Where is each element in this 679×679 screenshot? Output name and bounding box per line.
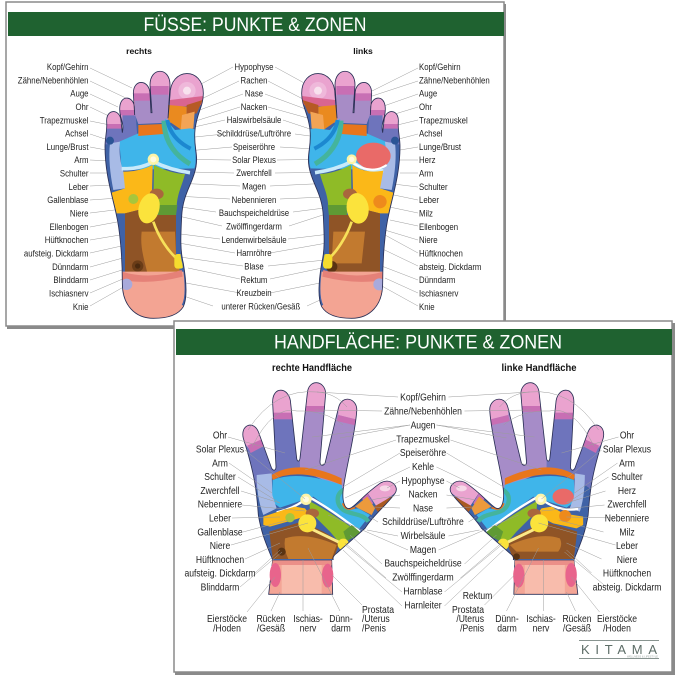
labels: right hand column: Solar Plexus: [196, 444, 244, 455]
labels: palm centre column: Augen: [411, 420, 435, 431]
heading: links: links: [353, 46, 373, 56]
labels: feet centre column: Schilddrüse/Luftröhre: [217, 128, 291, 139]
labels: right hand column: Arm: [212, 458, 228, 469]
labels: right hand bottom row: [207, 604, 395, 634]
labels: right hand bottom row: /Penis: [362, 623, 386, 634]
labels: right foot column: Ohr: [75, 101, 89, 112]
illustration: left hand: [443, 375, 610, 594]
labels: right hand bottom row: darm: [331, 623, 351, 634]
labels: left hand column: Milz: [619, 527, 635, 538]
labels: feet centre column: Lendenwirbelsäule: [221, 234, 287, 245]
labels: palm centre column: Harnleiter: [404, 600, 442, 611]
heading: rechte Handfläche: rechte Handfläche: [272, 363, 352, 374]
feet title bar: [8, 12, 504, 36]
illustration: right foot: [104, 70, 204, 319]
labels: palm centre column: Kopf/Gehirn: [400, 392, 446, 403]
labels: left hand bottom row: Rücken: [562, 613, 592, 624]
labels: left hand bottom row: Rektum: [463, 590, 493, 601]
labels: palm centre column: Bauchspeicheldrüse: [384, 558, 462, 569]
labels: right hand bottom row: /Uterus: [362, 613, 390, 624]
illustration: right hand: [237, 375, 403, 594]
labels: left hand column: Nebenniere: [605, 513, 649, 524]
labels: palm centre column: Nacken: [408, 489, 438, 500]
labels: palm centre column: Nase: [413, 503, 433, 514]
labels: feet centre column: Rachen: [241, 75, 268, 86]
labels: left foot column: Milz: [419, 208, 433, 219]
labels: right hand bottom row: Rücken: [256, 613, 286, 624]
labels: left foot column: Ellenbogen: [419, 221, 458, 232]
labels: left hand bottom row: Prostata: [452, 604, 485, 615]
heading: rechts: rechts: [126, 46, 152, 56]
labels: left hand column: Zwerchfell: [607, 499, 647, 510]
labels: left hand column: Leber: [616, 540, 638, 551]
labels: right hand column: Ohr: [213, 430, 227, 441]
labels: feet centre column: Zwerchfell: [236, 167, 272, 178]
labels: right hand column: Niere: [210, 540, 230, 551]
labels: right hand bottom row: Prostata: [362, 604, 395, 615]
labels: feet centre column: Speiseröhre: [233, 141, 275, 152]
labels: left hand bottom row: nerv: [533, 623, 550, 634]
labels: feet centre column: Blase: [244, 261, 264, 272]
labels: left hand column: Solar Plexus: [603, 444, 651, 455]
labels: feet centre column: Kreuzbein: [236, 287, 272, 298]
labels: right hand column: Hüftknochen: [196, 554, 244, 565]
labels: right foot column: aufsteig. Dickdarm: [24, 248, 88, 259]
labels: left foot column: Niere: [419, 234, 438, 245]
labels: left foot column: Kopf/Gehirn: [419, 61, 461, 72]
labels: palm centre column: Zähne/Nebenhöhlen: [384, 406, 462, 417]
labels: palm centre column: Hypophyse: [402, 475, 444, 486]
labels: palm centre column: Kehle: [412, 461, 434, 472]
labels: right foot column: Arm: [74, 154, 88, 165]
labels: palm centre column: Schilddrüse/Luftröhre: [382, 516, 464, 527]
labels: left hand bottom row: /Uterus: [456, 613, 484, 624]
labels: left hand bottom row: Dünn-: [495, 613, 519, 624]
labels: right hand bottom row: Eierstöcke: [207, 613, 247, 624]
labels: right foot column: Ellenbogen: [49, 221, 89, 232]
labels: left foot column: Knie: [419, 301, 435, 312]
labels: right hand column: Schulter: [204, 471, 236, 482]
labels: feet centre column: Harnröhre: [236, 247, 272, 258]
labels: palm centre column: Trapezmuskel: [396, 434, 450, 445]
labels: feet centre column: Rektum: [241, 274, 267, 285]
leader lines: left foot: [265, 67, 418, 306]
logo: KITAMA: KITAMA: [581, 642, 657, 657]
labels: right hand bottom row: Ischias-: [293, 613, 323, 624]
labels: right hand column: Leber: [209, 513, 231, 524]
labels: left foot column: Achsel: [419, 128, 443, 139]
labels: feet centre column: Bauchspeicheldrüse: [219, 207, 289, 218]
labels: feet centre column: Solar Plexus: [232, 154, 276, 165]
labels: left foot column: Ohr: [419, 101, 432, 112]
labels: feet centre column: Nacken: [241, 101, 267, 112]
labels: feet centre column: Hypophyse: [234, 61, 274, 72]
labels: right hand column: Blinddarm: [201, 582, 240, 593]
labels: left foot column: Hüftknochen: [419, 248, 463, 259]
labels: right foot column: Lunge/Brust: [46, 141, 89, 152]
leader lines: right hand: [228, 392, 410, 612]
labels: palm centre column: Magen: [410, 544, 436, 555]
labels: left hand column: [593, 430, 662, 593]
labels: left foot column: Schulter: [419, 181, 448, 192]
labels: left hand bottom row: Ischias-: [526, 613, 556, 624]
labels: right foot column: [18, 61, 89, 312]
labels: feet centre column: Magen: [242, 181, 266, 192]
leader lines: left hand: [436, 392, 618, 612]
labels: left foot column: Herz: [419, 154, 435, 165]
labels: left hand bottom row: [452, 590, 637, 634]
labels: right foot column: Niere: [70, 208, 89, 219]
labels: right foot column: Auge: [70, 88, 89, 99]
labels: left foot column: Lunge/Brust: [419, 141, 462, 152]
panel: palm card: [174, 321, 675, 675]
panel: feet card: [6, 2, 506, 329]
feet title bar: FÜSSE: PUNKTE & ZONEN: [144, 14, 366, 36]
labels: feet centre column: Nebennieren: [232, 194, 277, 205]
labels: right foot column: Zähne/Nebenhöhlen: [18, 75, 89, 86]
labels: left foot column: Dünndarm: [419, 274, 455, 285]
labels: left hand bottom row: darm: [497, 623, 517, 634]
labels: palm centre column: [382, 392, 464, 611]
labels: left hand bottom row: /Penis: [460, 623, 484, 634]
labels: right foot column: Ischiasnerv: [49, 288, 89, 299]
labels: left foot column: Ischiasnerv: [419, 288, 459, 299]
labels: left foot column: Zähne/Nebenhöhlen: [419, 75, 490, 86]
labels: left foot column: absteig. Dickdarm: [419, 261, 481, 272]
leader lines: right foot: [90, 67, 243, 306]
labels: feet centre column: Halswirbelsäule: [227, 114, 282, 125]
labels: right hand column: [184, 430, 256, 593]
labels: left hand column: absteig. Dickdarm: [593, 582, 662, 593]
palm title bar: [176, 329, 672, 355]
labels: left foot column: Leber: [419, 194, 439, 205]
labels: left foot column: [419, 61, 490, 312]
labels: right foot column: Trapezmuskel: [40, 115, 89, 126]
palm title bar: HANDFLÄCHE: PUNKTE & ZONEN: [274, 332, 562, 354]
labels: palm centre column: Speiseröhre: [400, 447, 446, 458]
labels: palm centre column: Harnblase: [403, 586, 443, 597]
labels: right foot column: Kopf/Gehirn: [47, 61, 89, 72]
labels: left hand column: Herz: [618, 485, 636, 496]
labels: left hand bottom row: /Gesäß: [563, 623, 591, 634]
labels: right foot column: Dünndarm: [52, 261, 88, 272]
labels: feet centre column: [217, 61, 300, 312]
labels: right hand bottom row: Dünn-: [329, 613, 353, 624]
labels: feet centre column: unterer Rücken/Gesäß: [221, 301, 300, 312]
labels: right hand column: Zwerchfell: [200, 485, 240, 496]
labels: left foot column: Auge: [419, 88, 437, 99]
labels: right foot column: Knie: [73, 301, 89, 312]
illustration: left foot: [301, 70, 400, 319]
heading: linke Handfläche: linke Handfläche: [502, 363, 577, 374]
labels: right foot column: Hüftknochen: [45, 234, 89, 245]
labels: right foot column: Leber: [69, 181, 89, 192]
labels: left hand column: Schulter: [611, 471, 643, 482]
labels: right foot column: Gallenblase: [47, 194, 89, 205]
labels: left hand column: Niere: [617, 554, 637, 565]
labels: right hand bottom row: /Hoden: [213, 623, 241, 634]
labels: right hand column: aufsteig. Dickdarm: [184, 568, 256, 579]
labels: left hand column: Hüftknochen: [603, 568, 651, 579]
labels: right foot column: Schulter: [60, 168, 89, 179]
labels: left hand bottom row: /Hoden: [603, 623, 631, 634]
labels: right hand column: Gallenblase: [197, 527, 243, 538]
labels: right foot column: Blinddarm: [53, 274, 88, 285]
labels: feet centre column: Nase: [245, 88, 263, 99]
labels: left foot column: Trapezmuskel: [419, 115, 468, 126]
labels: right hand column: Nebenniere: [198, 499, 242, 510]
logo: KITAMA: WELLNESS & LIFESTYLE: [627, 654, 658, 658]
labels: left hand bottom row: Eierstöcke: [597, 613, 637, 624]
labels: left hand column: Ohr: [620, 430, 634, 441]
labels: right hand bottom row: /Gesäß: [257, 623, 285, 634]
labels: right foot column: Achsel: [65, 128, 89, 139]
labels: palm centre column: Zwölffingerdarm: [392, 572, 454, 583]
labels: palm centre column: Wirbelsäule: [401, 530, 445, 541]
labels: left hand column: Arm: [619, 458, 635, 469]
labels: left foot column: Arm: [419, 168, 433, 179]
labels: right hand bottom row: nerv: [300, 623, 317, 634]
labels: feet centre column: Zwölffingerdarm: [226, 221, 282, 232]
